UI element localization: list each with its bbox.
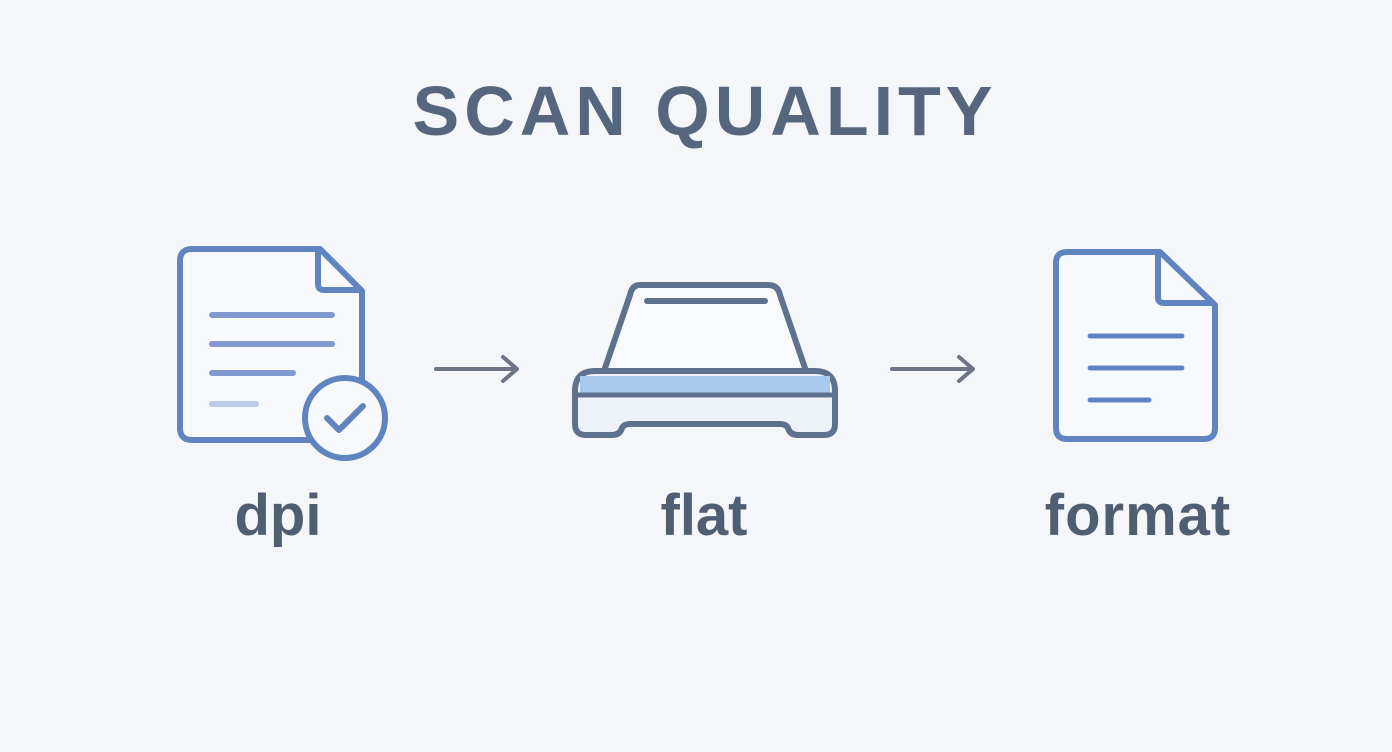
title: SCAN QUALITY [412,72,998,150]
icon: document with check [180,249,385,458]
arrow 2 [892,357,973,381]
icon: flatbed scanner [575,285,835,435]
label: flat: flat [660,483,748,548]
label: dpi: dpi [235,483,321,548]
icon: document [1056,252,1215,439]
label: format: format [1045,483,1231,548]
arrow 1 [436,357,517,381]
